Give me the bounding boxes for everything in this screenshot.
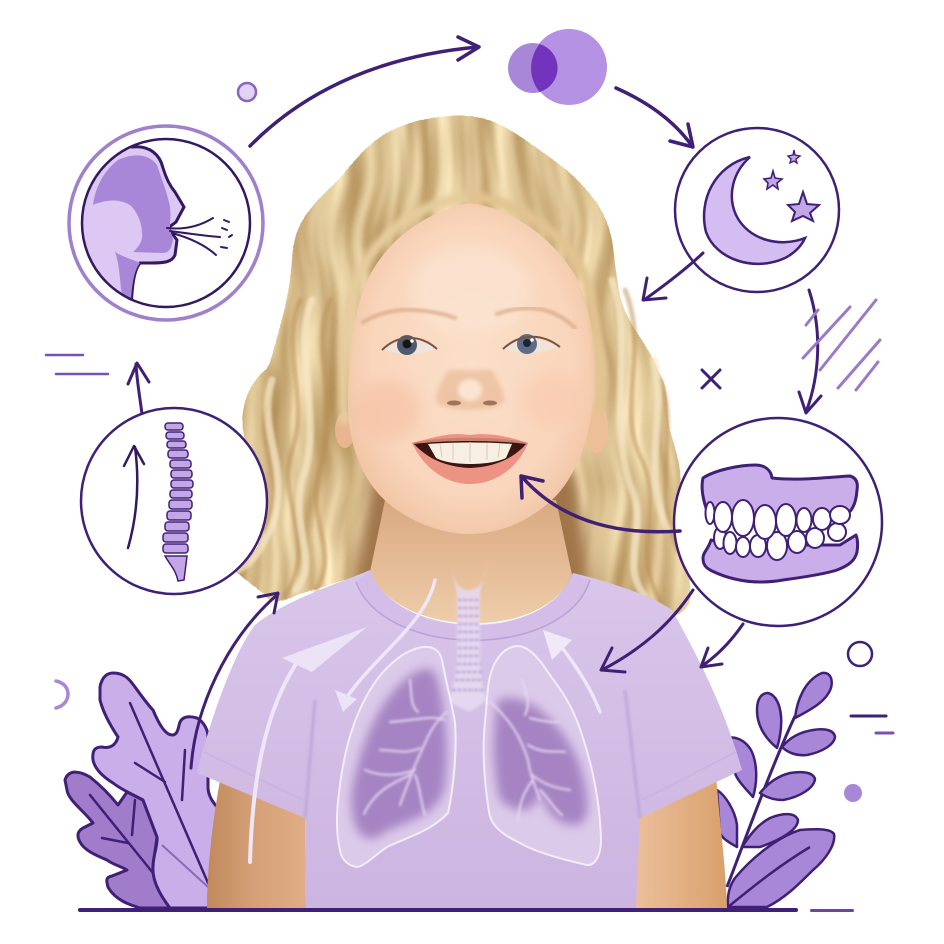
airflow arrows on shirt [250,580,600,862]
child shirt [197,570,742,908]
x mark [702,370,720,388]
light leaf [93,673,225,908]
arrow moon to face [643,253,703,300]
right leaves [717,673,835,907]
left arm [207,780,306,908]
nose [436,370,504,410]
left leaves [65,673,225,908]
left lung [337,647,456,867]
ring right [848,642,872,666]
dashes left [46,355,108,374]
ground line [78,908,854,912]
hair front strands [343,196,600,420]
eyebrows [363,308,575,328]
venn icon [508,29,607,105]
dashes right [851,716,893,733]
panel: breath [60,126,263,320]
arrow teeth to shirt [601,590,693,672]
child hair [225,122,688,614]
dot right [844,784,862,802]
hatch decoration [803,300,880,390]
eyes [382,334,560,355]
arrow spine to breath [128,363,149,414]
trachea [448,562,488,712]
panel: moon [675,128,839,292]
shadow behind neck [350,470,592,590]
arrow moon to teeth [799,290,821,413]
crescent mark [56,681,68,708]
lower gum [703,535,858,582]
arrow leaves to spine [191,593,278,768]
arrow teeth to leaves [701,624,743,667]
upper gum [702,465,857,520]
child face [335,203,608,534]
panel: spine [81,408,267,594]
top arrow [250,37,479,146]
small circle top left [238,83,256,101]
right arm [636,775,727,908]
arrow to moon [616,88,693,147]
right lung [484,646,601,865]
mouth [412,434,528,484]
arrow teeth to mouth [521,476,680,532]
child neck [370,500,572,623]
panel: teeth [674,418,882,626]
dark leaf [65,772,170,908]
